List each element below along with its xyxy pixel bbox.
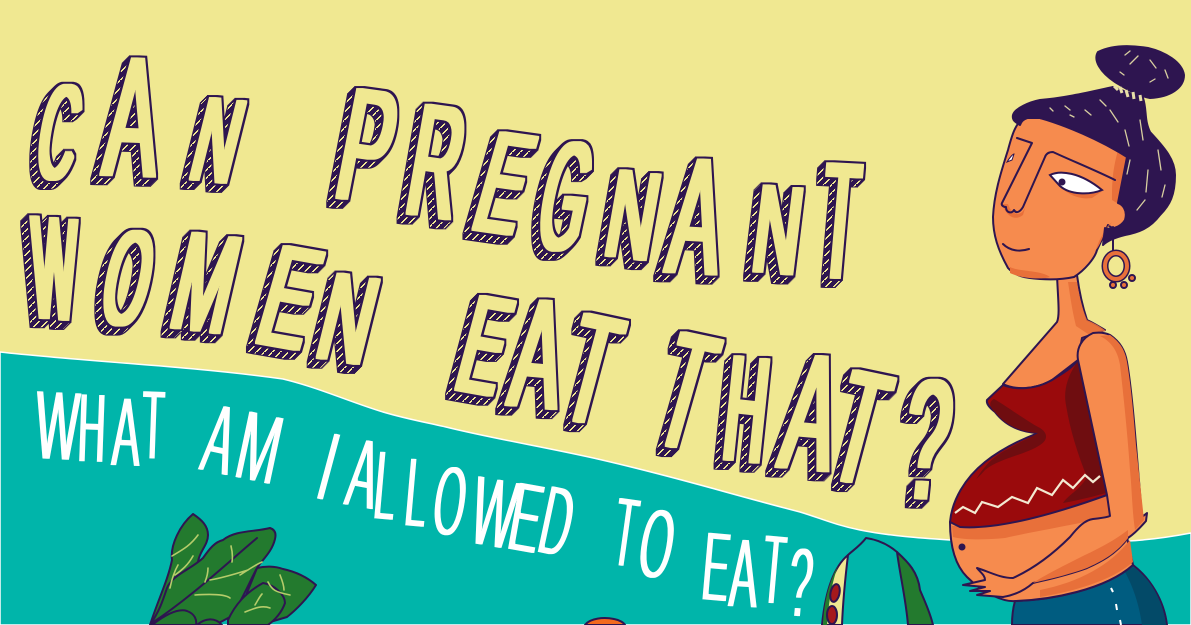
subtitle: L [401, 438, 432, 550]
belly and torso skin [950, 495, 1133, 601]
face [993, 118, 1130, 279]
earring [1105, 227, 1135, 288]
navel [958, 544, 966, 550]
subtitle: O [631, 488, 683, 603]
pants [1012, 565, 1167, 625]
icon: bean pods [822, 538, 933, 625]
hair [1013, 87, 1175, 245]
subtitle: A [193, 383, 246, 498]
title: A [771, 320, 853, 507]
woman character [950, 46, 1184, 625]
title: P [325, 54, 410, 238]
subtitle: W [463, 456, 525, 572]
title: R [397, 70, 476, 254]
red top [950, 360, 1107, 527]
title: C [28, 55, 91, 209]
title: T [640, 299, 733, 486]
zigzag pattern [955, 475, 1100, 513]
title: E [460, 102, 549, 266]
title: M [160, 201, 252, 364]
subtitle: M [228, 388, 292, 507]
subtitle: D [530, 465, 583, 580]
title: T [548, 280, 636, 458]
subtitle: W [33, 370, 82, 483]
title: A [502, 265, 574, 442]
icon: spinach leaves [150, 514, 316, 625]
subtitle: L [370, 431, 401, 543]
icon: orange fruit [585, 618, 625, 625]
subtitle: T [140, 369, 166, 481]
hair highlights [1050, 51, 1168, 210]
title: H [718, 324, 775, 496]
title: A [99, 22, 167, 214]
title [28, 22, 960, 537]
title: N [181, 72, 255, 209]
arm shading [1100, 335, 1144, 530]
subtitle: H [76, 373, 108, 485]
subtitle: A [339, 417, 388, 532]
background: teal wave [0, 352, 1191, 625]
title: E [243, 214, 337, 381]
face shading [1002, 147, 1127, 278]
title: O [91, 202, 166, 356]
subtitle: A [110, 377, 142, 489]
title: E [444, 266, 526, 426]
title: ? [896, 344, 960, 537]
title: N [306, 246, 390, 391]
subtitle: E [698, 511, 734, 625]
title: T [815, 129, 865, 315]
hair band [1114, 86, 1141, 101]
subtitle: T [758, 513, 790, 625]
title: W [32, 186, 76, 353]
neck and chest [1003, 275, 1105, 388]
title: G [526, 108, 606, 284]
subtitle [33, 369, 817, 625]
subtitle: O [427, 445, 473, 559]
title: N [747, 159, 809, 303]
hair bun [1096, 46, 1184, 98]
title: N [597, 144, 669, 288]
title: A [661, 123, 733, 310]
subtitle: T [607, 475, 644, 589]
subtitle: E [501, 462, 551, 576]
subtitle: I [307, 410, 350, 522]
title: T [816, 337, 905, 520]
eye and brow [1002, 138, 1115, 251]
arm [963, 333, 1147, 597]
red top shadows [1063, 361, 1106, 503]
